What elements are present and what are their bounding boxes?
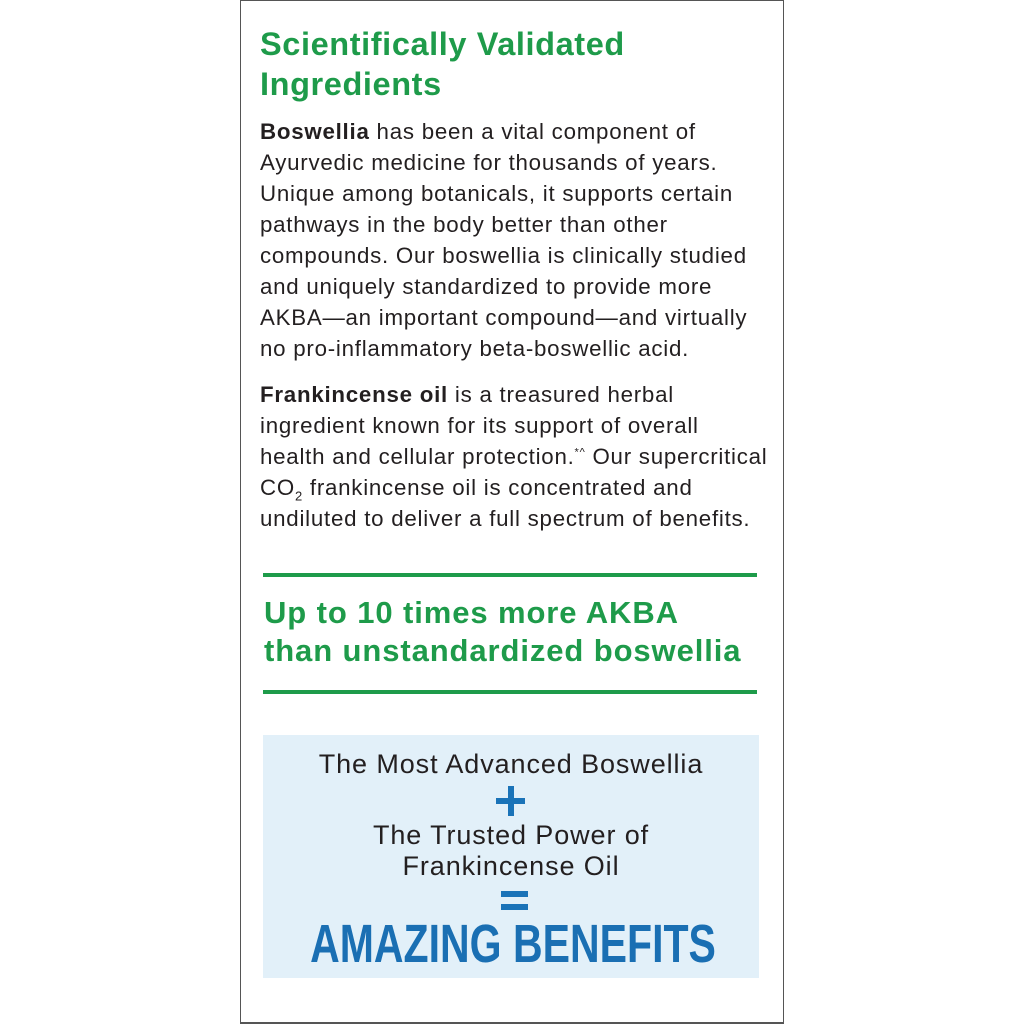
text: frankincense power: The Trusted Power of xyxy=(373,820,649,850)
text block: boswellia: and uniquely standardized to provide more xyxy=(260,274,712,299)
text block: frankincense: health and cellular protection.*^ Our supercritical xyxy=(260,444,768,469)
text block: boswellia: Boswellia has been a vital component of xyxy=(260,119,696,144)
text block: boswellia: compounds. Our boswellia is clinically studied xyxy=(260,243,747,268)
callout: AKBA claim: than unstandardized boswellia xyxy=(264,633,741,668)
callout: AKBA claim: Up to 10 times more AKBA xyxy=(264,595,679,630)
title: Ingredients xyxy=(260,66,442,102)
icon: equals xyxy=(501,891,528,910)
text block: boswellia: Unique among botanicals, it supports certain xyxy=(260,181,733,206)
text block: frankincense: ingredient known for its support of overall xyxy=(260,413,699,438)
text: frankincense power xyxy=(373,820,649,881)
panel: equation xyxy=(263,735,759,978)
frame xyxy=(240,0,784,1024)
icon: plus xyxy=(496,786,525,816)
text: amazing benefits: AMAZING BENEFITS xyxy=(310,914,716,974)
text block: boswellia xyxy=(260,119,747,361)
title: Scientifically Validated xyxy=(260,26,625,62)
text block: frankincense: undiluted to deliver a full spectrum of benefits. xyxy=(260,506,750,531)
text block: boswellia: no pro-inflammatory beta-boswellic acid. xyxy=(260,336,689,361)
text block: frankincense: Frankincense oil is a treasured herbal xyxy=(260,382,674,407)
text: frankincense power: Frankincense Oil xyxy=(402,851,619,881)
text block: boswellia: pathways in the body better than other xyxy=(260,212,668,237)
text block: boswellia: AKBA—an important compound—and virtually xyxy=(260,305,747,330)
text block: frankincense: CO2 frankincense oil is concentrated and xyxy=(260,475,693,503)
text block: frankincense xyxy=(260,382,768,531)
callout: AKBA claim xyxy=(264,595,741,668)
title xyxy=(260,26,625,102)
text: advanced boswellia: The Most Advanced Boswellia xyxy=(319,749,703,779)
text block: boswellia: Ayurvedic medicine for thousands of years. xyxy=(260,150,717,175)
